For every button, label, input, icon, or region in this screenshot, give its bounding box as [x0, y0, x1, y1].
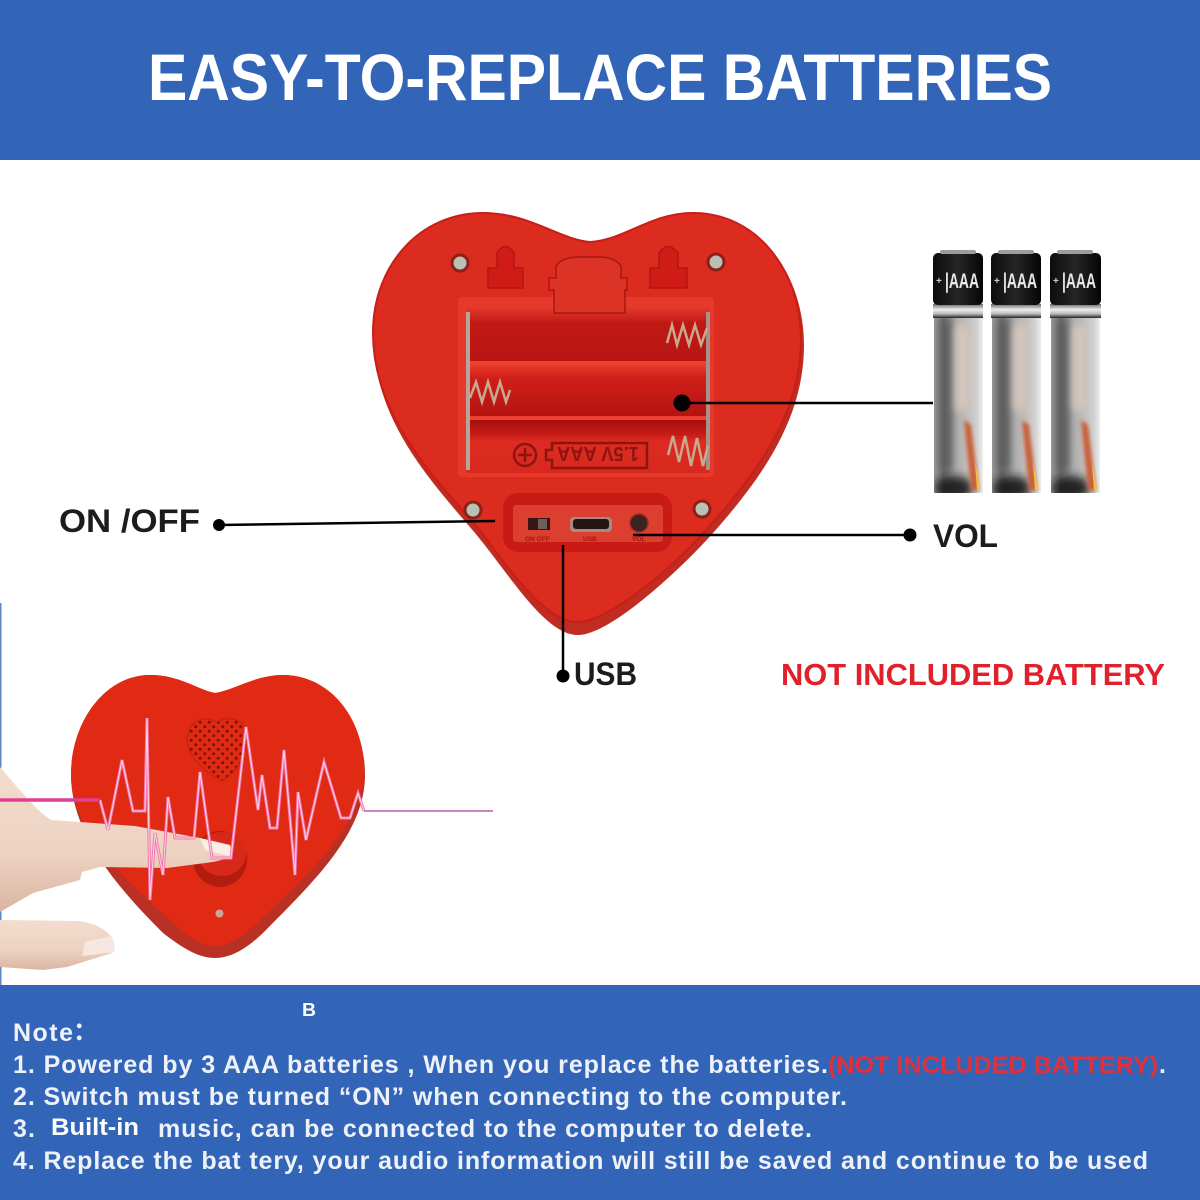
- volume knob: [630, 514, 648, 532]
- battery warning: NOT INCLUDED BATTERY: [781, 657, 1165, 692]
- callout: on/off: ON /OFF: [59, 503, 200, 539]
- battery 3: +: [1053, 276, 1059, 287]
- note heading: Note: [13, 1019, 73, 1047]
- battery 3: [1050, 250, 1101, 500]
- screws: [452, 254, 724, 518]
- device back: red heart with battery compartment: [373, 213, 804, 635]
- note 4: 4. Replace the bat tery, your audio information will still be saved and continue to be used: [13, 1147, 1148, 1175]
- note 3: [13, 1114, 812, 1143]
- hand: [0, 767, 232, 970]
- panel markings: VOL: [632, 536, 645, 543]
- callout: volume: VOL: [933, 518, 998, 554]
- callout: usb: USB: [574, 656, 637, 692]
- heartbeat line: [0, 718, 493, 900]
- power switch: [528, 518, 550, 530]
- title: EASY-TO-REPLACE BATTERIES: [148, 40, 1052, 114]
- battery 1: +: [936, 276, 942, 287]
- hanging slots: [488, 246, 687, 288]
- not included warning: (NOT INCLUDED BATTERY): [828, 1052, 1158, 1079]
- note 2: 2. Switch must be turned “ON” when connecting to the computer.: [13, 1083, 847, 1111]
- battery 3: |AAA: [1062, 270, 1096, 293]
- battery 2: +: [994, 276, 1000, 287]
- battery compartment: [458, 297, 714, 477]
- compartment label: 1.5V AAA: [557, 442, 639, 464]
- speaker grille: [187, 719, 247, 781]
- battery 2: |AAA: [1003, 270, 1037, 293]
- push button: [193, 831, 247, 887]
- note 3: 3.: [13, 1115, 35, 1143]
- battery 2: [991, 250, 1041, 500]
- panel markings: USB: [583, 536, 597, 543]
- note colon: ：: [73, 1018, 98, 1046]
- title banner: [0, 0, 1200, 160]
- callout: usb: [556, 545, 637, 692]
- notes panel: [0, 985, 1200, 1200]
- callout: on/off: [59, 503, 495, 539]
- panel markings: ON OFF: [525, 536, 550, 543]
- photo edge line: [0, 603, 2, 985]
- springs: [470, 325, 708, 466]
- indicator light: [216, 910, 224, 918]
- device front photo: [0, 675, 493, 970]
- heart body: [373, 213, 804, 635]
- heart front body: [71, 675, 365, 958]
- AAA batteries: [933, 250, 1101, 500]
- stray letter: B: [302, 1000, 316, 1020]
- battery 1: |AAA: [945, 270, 979, 293]
- note 3 remainder: music, can be connected to the computer to delete.: [158, 1115, 812, 1143]
- callout: battery compartment leader: [674, 394, 933, 412]
- panel markings: [525, 536, 645, 543]
- battery latch: [549, 257, 627, 313]
- control panel: [503, 493, 672, 552]
- note 1 period: .: [1159, 1051, 1166, 1079]
- polarity marking: [514, 443, 647, 468]
- usb port: [570, 517, 612, 532]
- battery 1: [933, 250, 983, 500]
- built-in: Built-in: [51, 1114, 139, 1141]
- callout: volume: [633, 518, 998, 554]
- note 1: 1. Powered by 3 AAA batteries , When you replace the batteries.: [13, 1051, 828, 1079]
